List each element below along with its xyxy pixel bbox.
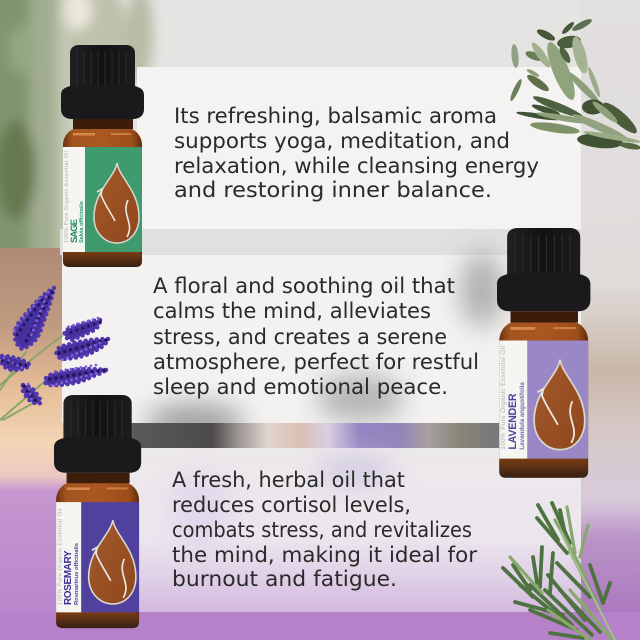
bottle: sage: SAGE [69, 219, 80, 243]
bottle: lavender: 100% Pure Organic Essential Oil [500, 346, 507, 450]
panel: lavender: calms the mind, alleviates [153, 299, 431, 323]
bottle: rosemary: 100% Pure Organic Essential Oil [57, 508, 63, 605]
panel: lavender: sleep and emotional peace. [153, 375, 448, 399]
lavender description text: A floral and soothing oil that [153, 274, 455, 298]
panel: rosemary: combats stress, and revitalizes [172, 518, 472, 542]
band between sage and lavender panels [60, 229, 580, 255]
bottle: lavender: Lavandula angustifolia [519, 382, 526, 450]
icon: rosemary sprig [503, 503, 615, 640]
bottle: rosemary [54, 395, 141, 628]
icon: lavender sprigs [0, 288, 108, 420]
bottle: lavender: LAVENDER [507, 393, 519, 450]
sage description text: Its refreshing, balsamic aroma [174, 104, 497, 128]
panel: rosemary: the mind, making it ideal for [172, 543, 477, 567]
panel: rosemary: reduces cortisol levels, [172, 493, 411, 517]
panel: lavender: atmosphere, perfect for restful [153, 350, 479, 374]
bottle: sage [61, 45, 144, 267]
bottle: rosemary: Rosmarinus officinalis [74, 543, 80, 605]
bottle: sage: Salvia officinalis [79, 201, 85, 243]
panel: rosemary [100, 448, 581, 612]
band between lavender and rosemary panels [100, 423, 500, 448]
panel: sage [137, 67, 581, 229]
bottle: lavender [497, 228, 590, 478]
panel: rosemary: burnout and fatigue. [172, 567, 397, 591]
panel: sage: relaxation, while cleansing energy [174, 154, 539, 178]
bottle: rosemary: ROSEMARY [63, 550, 74, 605]
rosemary description text: A fresh, herbal oil that [172, 468, 405, 492]
icon: sage sprig [509, 17, 640, 151]
panel: lavender: stress, and creates a serene [153, 325, 447, 349]
bottle: sage: 100% Pure Organic Essential Oil [64, 151, 70, 243]
panel: sage: and restoring inner balance. [174, 178, 492, 202]
panel: lavender [62, 252, 581, 440]
panel: sage: supports yoga, meditation, and [174, 129, 510, 153]
